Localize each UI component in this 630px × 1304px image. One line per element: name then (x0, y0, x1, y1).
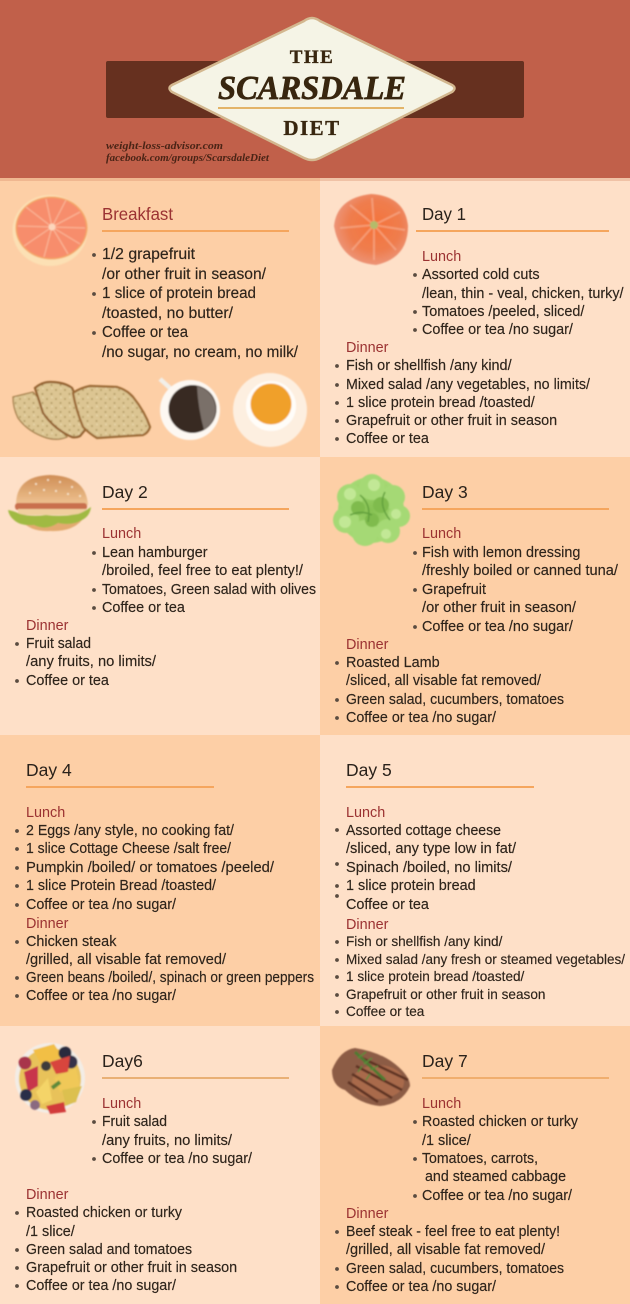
list: day 4 dinner: Coffee or tea /no sugar/ (26, 988, 176, 1004)
list: day 3 dinner: Roasted Lamb (346, 655, 440, 671)
heading: day 6: Day6 (102, 1051, 143, 1071)
header banner (0, 0, 630, 181)
title diamond (170, 18, 454, 160)
heading: day 4: Day 4 (26, 760, 72, 780)
label: lunch: Lunch (102, 526, 141, 542)
list: day 2 lunch: Tomatoes, Green salad with olives (102, 582, 316, 598)
list: day 4 lunch: 1 slice Cottage Cheese /salt free/ (26, 841, 231, 857)
list: day 6 lunch: Fruit salad (102, 1114, 167, 1130)
list: day 4 lunch: Coffee or tea /no sugar/ (26, 897, 176, 913)
title: the: THE (290, 47, 334, 68)
list: day 6 lunch: Coffee or tea /no sugar/ (102, 1151, 252, 1167)
list: day 4 lunch: 2 Eggs /any style, no cooking fat/ (26, 823, 234, 839)
list: day 3 lunch: Fish with lemon dressing (422, 545, 580, 561)
list: breakfast items: 1 slice of protein bread (102, 285, 256, 302)
list: day 3 dinner: /sliced, all visable fat removed/ (346, 673, 541, 689)
list: day 1 dinner: Fish or shellfish /any kind/ (346, 358, 512, 374)
icon: bread slices (13, 382, 150, 439)
list: day 2 lunch (92, 545, 316, 616)
list: day 2 lunch: Lean hamburger (102, 545, 208, 561)
icon: coffee cup (160, 379, 220, 440)
list: day 6 dinner: /1 slice/ (26, 1224, 75, 1240)
list: day 1 lunch: Assorted cold cuts (422, 267, 540, 283)
title: diet: DIET (283, 116, 341, 140)
list: day 4 lunch: 1 slice Protein Bread /toasted/ (26, 878, 216, 894)
list: day 5 lunch: Assorted cottage cheese (346, 823, 501, 839)
list: day 5 dinner: Grapefruit or other fruit in season (346, 987, 545, 1002)
panel: day 3 (320, 457, 630, 735)
list: day 2 lunch: /broiled, feel free to eat plenty!/ (102, 563, 303, 579)
list: day 1 lunch: Coffee or tea /no sugar/ (422, 322, 573, 338)
icon: fruit salad bowl (15, 1043, 85, 1114)
list: day 1 lunch: /lean, thin - veal, chicken, turky/ (422, 286, 624, 302)
list: day 1 lunch (413, 267, 624, 338)
label: lunch: Lunch (26, 805, 65, 821)
list: day 6 lunch (92, 1114, 252, 1167)
list: day 6 dinner: Roasted chicken or turky (26, 1205, 183, 1221)
icon: lettuce (333, 474, 410, 546)
list: day 5 lunch: 1 slice protein bread (346, 878, 476, 894)
label: dinner: Dinner (26, 1187, 69, 1203)
icon: tea cup and saucer (233, 373, 307, 447)
list: day 4 dinner: Chicken steak (26, 934, 117, 950)
list: day 3 dinner: Green salad, cucumbers, tomatoes (346, 692, 564, 708)
label: lunch: Lunch (422, 1096, 461, 1112)
panel: day 1 (320, 178, 630, 457)
label: dinner: Dinner (346, 917, 389, 933)
list: day 2 dinner: Fruit salad (26, 636, 91, 652)
label: dinner: Dinner (346, 1206, 389, 1222)
panel: day 4 (0, 735, 320, 1026)
list: day 1 dinner: 1 slice protein bread /toasted/ (346, 395, 535, 411)
label: dinner: Dinner (26, 618, 69, 634)
heading: day 2: Day 2 (102, 482, 148, 502)
list: day 1 dinner: Coffee or tea (346, 431, 429, 447)
list: day 5 lunch: Coffee or tea (346, 897, 429, 913)
list: day 5 lunch (335, 823, 516, 913)
list: day 7 lunch: and steamed cabbage (425, 1169, 566, 1185)
list: breakfast items: 1/2 grapefruit (102, 246, 196, 263)
heading: day 5: Day 5 (346, 760, 392, 780)
list: day 6 dinner: Green salad and tomatoes (26, 1242, 192, 1258)
heading: day 1: Day 1 (422, 204, 466, 224)
website credits: facebook.com/groups/ScarsdaleDiet (106, 152, 270, 164)
list: day 5 lunch: /sliced, any type low in fat/ (346, 841, 516, 857)
website credits: weight-loss-advisor.com (106, 140, 223, 152)
panel: breakfast (0, 178, 320, 457)
list: day 3 lunch: /or other fruit in season/ (422, 600, 576, 616)
label: lunch: Lunch (422, 249, 461, 265)
title: scarsdale: SCARSDALE (218, 70, 406, 107)
heading: day 7: Day 7 (422, 1051, 468, 1071)
label: dinner: Dinner (346, 340, 389, 356)
list: day 3 lunch: Coffee or tea /no sugar/ (422, 619, 573, 635)
list: breakfast items: /or other fruit in season/ (102, 266, 267, 283)
list: day 7 lunch: Roasted chicken or turky (422, 1114, 579, 1130)
label: dinner: Dinner (26, 916, 69, 932)
website credits (106, 140, 270, 164)
panel: day 7 (320, 1026, 630, 1304)
list: day 2 dinner: /any fruits, no limits/ (26, 654, 156, 670)
list: day 4 dinner (15, 934, 314, 1004)
list: day 5 dinner: 1 slice protein bread /toasted/ (346, 969, 525, 984)
list: day 5 lunch: Spinach /boiled, no limits/ (346, 860, 512, 876)
list: day 7 lunch: /1 slice/ (422, 1133, 471, 1149)
label: lunch: Lunch (102, 1096, 141, 1112)
list: day 7 lunch (413, 1114, 579, 1204)
list: breakfast items (92, 246, 299, 361)
list: day 7 dinner: Green salad, cucumbers, tomatoes (346, 1261, 564, 1277)
panel: day 6 (0, 1026, 320, 1304)
list: day 5 dinner: Mixed salad /any fresh or steamed vegetables/ (346, 952, 625, 967)
list: day 3 lunch: Grapefruit (422, 582, 486, 598)
list: day 7 lunch: Tomatoes, carrots, (422, 1151, 538, 1167)
list: day 4 lunch (15, 823, 274, 913)
label: dinner: Dinner (346, 637, 389, 653)
heading: breakfast: Breakfast (102, 204, 173, 224)
list: day 3 dinner (335, 655, 564, 726)
list: day 1 lunch: Tomatoes /peeled, sliced/ (422, 304, 584, 320)
icon: tomato (334, 194, 408, 265)
list: day 2 dinner (15, 636, 156, 689)
list: day 7 dinner: /grilled, all visable fat removed/ (346, 1242, 545, 1258)
heading: day 3: Day 3 (422, 482, 468, 502)
list: breakfast items: Coffee or tea (102, 324, 188, 341)
dark ribbon (106, 61, 524, 118)
list: day 5 dinner: Coffee or tea (346, 1004, 425, 1019)
label: lunch: Lunch (346, 805, 385, 821)
list: day 6 dinner: Coffee or tea /no sugar/ (26, 1278, 176, 1294)
panel: day 2 (0, 457, 320, 735)
list: day 7 dinner (335, 1224, 564, 1295)
list: day 4 dinner: Green beans /boiled/, spinach or green peppers (26, 970, 314, 986)
list: day 1 dinner (335, 358, 590, 447)
list: day 6 lunch: /any fruits, no limits/ (102, 1133, 232, 1149)
list: day 5 dinner: Fish or shellfish /any kind/ (346, 934, 503, 949)
list: day 7 lunch: Coffee or tea /no sugar/ (422, 1188, 572, 1204)
list: day 3 lunch: /freshly boiled or canned tuna/ (422, 563, 618, 579)
list: day 2 dinner: Coffee or tea (26, 673, 109, 689)
label: lunch: Lunch (422, 526, 461, 542)
icon: grilled steak (332, 1048, 410, 1106)
list: day 4 lunch: Pumpkin /boiled/ or tomatoes /peeled/ (26, 860, 274, 876)
list: day 7 dinner: Beef steak - feel free to eat plenty! (346, 1224, 560, 1240)
list: day 1 dinner: Mixed salad /any vegetables, no limits/ (346, 377, 590, 393)
list: breakfast items: /toasted, no butter/ (102, 305, 234, 322)
list: breakfast items: /no sugar, no cream, no milk/ (102, 344, 299, 361)
panel: day 5 (320, 735, 630, 1026)
list: day 6 dinner: Grapefruit or other fruit in season (26, 1260, 237, 1276)
icon: hamburger (8, 475, 91, 531)
list: day 2 lunch: Coffee or tea (102, 600, 185, 616)
list: day 5 dinner (335, 934, 625, 1019)
list: day 7 dinner: Coffee or tea /no sugar/ (346, 1279, 496, 1295)
list: day 6 dinner (15, 1205, 237, 1294)
list: day 3 dinner: Coffee or tea /no sugar/ (346, 710, 496, 726)
list: day 3 lunch (413, 545, 618, 635)
list: day 4 dinner: /grilled, all visable fat removed/ (26, 952, 226, 968)
list: day 1 dinner: Grapefruit or other fruit in season (346, 413, 557, 429)
icon: grapefruit (12, 195, 88, 266)
